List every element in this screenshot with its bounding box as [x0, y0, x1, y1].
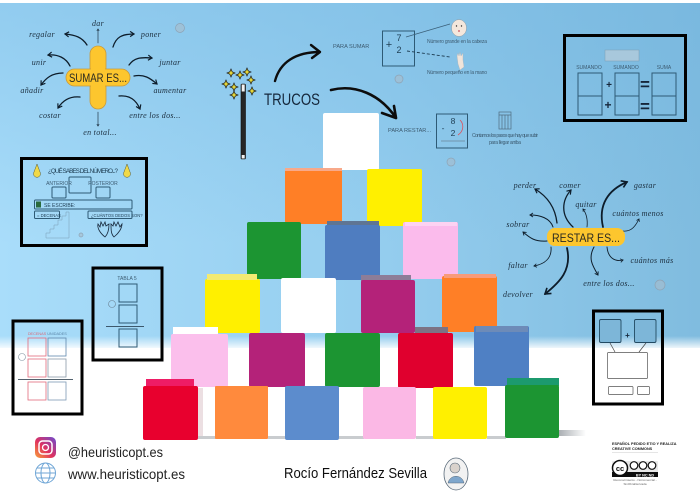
restar words: quitar [575, 200, 597, 209]
handle: @heuristicopt.es [68, 444, 163, 460]
panel: sumandos and suma grid [564, 36, 686, 120]
license: SinObraDerivada [623, 482, 647, 486]
license: ESPAÑOL PEDIDO ETIO Y REALIZA [612, 441, 677, 446]
block: green bottom [505, 378, 559, 438]
block: white row four [281, 278, 336, 333]
option pills [34, 211, 143, 218]
panel: sumandos and suma grid: SUMA [657, 65, 672, 71]
sum card: 7 [396, 33, 402, 43]
website: www.heuristicopt.es [67, 466, 185, 482]
sumar words: añadir [20, 86, 44, 95]
icon: hands [98, 222, 122, 237]
block: pink [403, 222, 458, 279]
restar words: sobrar [506, 220, 530, 229]
trailing shadow [558, 430, 586, 436]
icon: hand [457, 52, 464, 70]
sumar words: dar [92, 19, 105, 28]
block: white top [323, 113, 379, 170]
icon: cc badge: BY NC ND [636, 473, 654, 477]
block: pink bottom [363, 387, 416, 439]
block: green row five [325, 333, 380, 387]
panel: para restar trick: Contamos los pasos que hay que subir [472, 133, 538, 139]
writing bar: SE ESCRIBE: [44, 203, 75, 209]
panel: decenas and unidades: DECENAS [28, 332, 47, 336]
panel: sumandos and suma grid: SUMANDO [613, 65, 639, 71]
panel: sum diagram: + [625, 331, 630, 340]
icon: instagram [35, 437, 56, 458]
icon: lift [499, 112, 511, 129]
sumar words: poner [140, 30, 162, 39]
panel: que sabes del numero: ¿QUÉ SABES DEL NÚMERO...? [48, 166, 118, 175]
block: blue row five [474, 326, 529, 386]
license: CREATIVE COMMONS [612, 447, 653, 451]
license: Reconocimiento - NoComercial - [613, 478, 657, 482]
panel: sumar mind map [20, 19, 187, 137]
block: orange bottom [215, 386, 268, 439]
staircase chart [46, 212, 69, 238]
icon: cc badge: cc [616, 464, 624, 473]
icon: magic wand [222, 68, 256, 159]
sumar words: aumentar [153, 86, 187, 95]
panel: restar mind map [503, 181, 674, 299]
license [612, 441, 677, 486]
restar words: cuántos más [630, 256, 674, 265]
block: magenta [361, 275, 415, 333]
panel: vertical sum: TABLA 5 [117, 276, 137, 282]
block tower [143, 113, 586, 440]
subtraction card: 2 [451, 128, 456, 138]
restar words: gastar [634, 181, 657, 190]
panel: para sumar trick [333, 20, 487, 83]
sumar words: regalar [29, 30, 55, 39]
restar words: perder [513, 181, 537, 190]
block: red bottom [143, 379, 203, 440]
footer [35, 437, 677, 490]
icon: yellow plus with label: SUMAR ES... [69, 71, 127, 85]
operators: = [640, 97, 650, 116]
restar words: devolver [503, 290, 534, 299]
subtraction card: 8 [451, 116, 456, 126]
panel: sumandos and suma grid: SUMANDO [576, 65, 602, 71]
ground shadows [198, 436, 506, 439]
panel: decenas and unidades [13, 321, 82, 414]
restar words: faltar [508, 261, 528, 270]
block: green [247, 221, 379, 279]
icon: yellow plus with label [66, 46, 130, 109]
restar words: comer [559, 181, 581, 190]
panel: para restar trick: para llegar arriba [489, 140, 521, 146]
number boxes: ANTERIOR [46, 181, 72, 187]
panel: para sumar trick: Número pequeño en la mano [427, 70, 487, 76]
block: yellow bottom [433, 387, 487, 439]
answer boxes [578, 73, 676, 115]
icon: bulbs [34, 164, 131, 177]
operators: + [604, 98, 612, 112]
operators: = [640, 75, 650, 94]
restar arrows [523, 182, 639, 294]
icon: license mark [176, 24, 184, 32]
label pill [547, 228, 625, 246]
subtraction card: - [442, 123, 445, 133]
arrow: to para restar [331, 88, 396, 118]
sumar words: entre los dos... [129, 111, 181, 120]
sumar words: unir [32, 58, 47, 67]
restar words [503, 181, 674, 299]
panel: para restar trick: PARA RESTAR... [388, 128, 431, 134]
icon: globe [36, 463, 56, 483]
panel: sum diagram [594, 311, 662, 404]
block: yellow row four [205, 274, 260, 333]
label pill: RESTAR ES... [552, 231, 620, 245]
arrow: to para sumar [275, 45, 320, 81]
panel: para sumar trick: PARA SUMAR [333, 44, 369, 50]
block: orange [285, 168, 342, 224]
block: pink row five [171, 327, 228, 387]
pictogram strip [605, 50, 639, 61]
number boxes: POSTERIOR [88, 181, 118, 187]
operators [604, 75, 650, 116]
sumar words: en total... [83, 128, 117, 137]
sumar words: costar [39, 111, 61, 120]
sum card: + [386, 39, 392, 51]
option pills: ¿CUÁNTOS DEDOS SON? [91, 213, 143, 218]
block: blue bottom [285, 386, 339, 440]
panel: para restar trick [388, 112, 538, 166]
operators: + [606, 80, 612, 91]
restar words: cuántos menos [612, 209, 664, 218]
sumar words [20, 19, 187, 137]
heading: trucos: TRUCOS [264, 90, 320, 109]
sumar words: juntar [158, 58, 181, 67]
icon: author logo [444, 458, 468, 490]
author: Rocío Fernández Sevilla [284, 465, 428, 482]
restar words: entre los dos... [583, 279, 635, 288]
panel: para sumar trick: Número grande en la cabeza [427, 39, 487, 45]
panel: que sabes del numero [22, 158, 146, 246]
sum card [382, 24, 450, 66]
sumar arrows [41, 29, 157, 126]
block: red row five [398, 327, 453, 388]
icon: cc badge [612, 460, 658, 477]
subtraction card [436, 114, 468, 148]
option pills: = DECENAS [37, 213, 61, 218]
sum card: 2 [396, 45, 402, 55]
block: blue [325, 225, 380, 280]
panel: vertical sum [93, 268, 162, 360]
block: magenta row five [249, 333, 305, 387]
number boxes [46, 177, 118, 198]
block: yellow [367, 169, 422, 226]
block: orange row four [442, 274, 497, 332]
panel: decenas and unidades: UNIDADES [47, 332, 67, 336]
icon: face [452, 20, 466, 36]
